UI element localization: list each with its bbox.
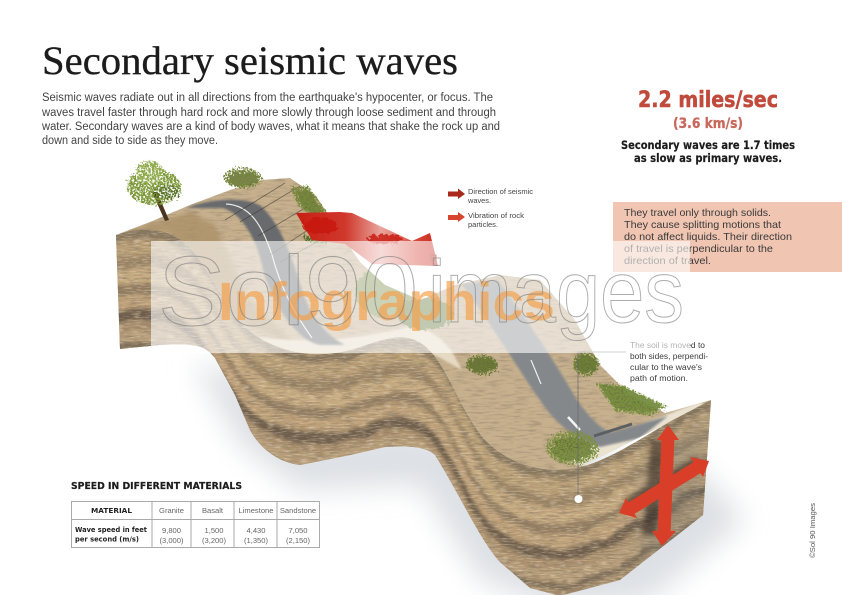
intro paragraph: Seismic waves radiate out in all directions from the earthquake's hypocenter, or focus. The	[42, 92, 493, 104]
icon: tree	[127, 161, 181, 221]
speed callout: Secondary waves are 1.7 times	[621, 138, 795, 152]
table: speed in materials: (3,200)	[202, 536, 227, 545]
legend: Direction of seismic	[468, 187, 533, 196]
callout: soil movement: cular to the wave's	[630, 362, 702, 372]
rock grain	[116, 234, 710, 595]
panel: solids note: They cause splitting motions that	[624, 219, 781, 231]
speed callout: as slow as primary waves.	[634, 151, 782, 165]
table: speed in materials: Granite	[159, 506, 184, 515]
heading: speed table: SPEED IN DIFFERENT MATERIALS	[71, 481, 242, 492]
table: speed in materials: (3,000)	[159, 536, 184, 545]
table: speed in materials: 1,500	[204, 526, 224, 535]
callout: soil movement	[574, 340, 708, 503]
table: speed in materials: MATERIAL	[91, 506, 132, 515]
bush: upper slope	[290, 185, 327, 222]
table: speed in materials: (2,150)	[286, 536, 311, 545]
speed callout	[621, 88, 795, 165]
legend: Vibration of rock	[468, 211, 524, 220]
bush: second slope	[466, 355, 498, 375]
callout: soil movement: both sides, perpendi-	[630, 351, 708, 361]
ground surface	[100, 170, 720, 480]
watermark: Sol90: Sol90	[158, 236, 418, 346]
panel: solids note: They travel only through solids.	[624, 207, 771, 219]
table: speed in materials: (1,350)	[244, 536, 269, 545]
bushes and vegetation	[224, 168, 668, 465]
speed callout: (3.6 km/s)	[673, 116, 743, 132]
callout: soil movement: path of motion.	[630, 373, 688, 383]
bush: arrow base	[303, 233, 333, 243]
intro paragraph: water. Secondary waves are a kind of body waves, what it means that shake the rock up and	[41, 121, 500, 133]
panel: solids note: of travel is perpendicular to the	[624, 243, 773, 255]
arrow: particle vibration cross	[619, 425, 709, 546]
legend	[448, 187, 533, 229]
title: Secondary seismic waves	[42, 38, 458, 83]
panel: solids note: do not affect liquids. Their direction	[624, 231, 792, 243]
terrain shadow	[195, 365, 745, 595]
table: speed in materials: Basalt	[202, 506, 224, 515]
table: speed in materials: Wave speed in feet	[75, 525, 148, 534]
road second crest	[462, 280, 668, 447]
icon: direction arrow	[448, 188, 465, 199]
arrow: wave direction	[296, 212, 438, 266]
panel: solids note: direction of travel.	[624, 255, 711, 267]
valley trees	[355, 267, 453, 330]
watermark: images: images	[428, 242, 684, 341]
table: speed in materials: per second (m/s)	[75, 534, 139, 544]
speed callout: 2.2 miles/sec	[638, 88, 778, 113]
intro paragraph: down and side to side as they move.	[42, 135, 218, 147]
rock cross-section face	[116, 229, 711, 595]
table: speed in materials: 7,050	[288, 526, 308, 535]
watermark: Infographics: Infographics	[218, 272, 555, 332]
table: speed in materials: Sandstone	[280, 506, 316, 515]
panel: solids note	[613, 202, 842, 272]
table: speed in materials	[72, 502, 320, 548]
legend: particles.	[468, 220, 498, 229]
icon: vibration arrow	[448, 212, 465, 222]
table: speed in materials: 9,800	[162, 526, 181, 535]
legend: waves.	[467, 196, 491, 205]
bush: crest	[224, 168, 262, 188]
callout: soil movement: The soil is moved to	[630, 340, 705, 350]
intro paragraph	[41, 92, 500, 147]
illustration: folded terrain	[90, 161, 725, 595]
credit: ©Sol 90 Images	[809, 502, 817, 558]
bush: foreground	[546, 431, 598, 465]
table: speed in materials: 4,430	[246, 526, 266, 535]
table: speed in materials: Limestone	[238, 506, 274, 515]
road first crest	[186, 200, 345, 345]
intro paragraph: waves travel faster through hard rock and more slowly through loose sediment and through	[41, 107, 496, 119]
watermark band	[151, 241, 690, 353]
